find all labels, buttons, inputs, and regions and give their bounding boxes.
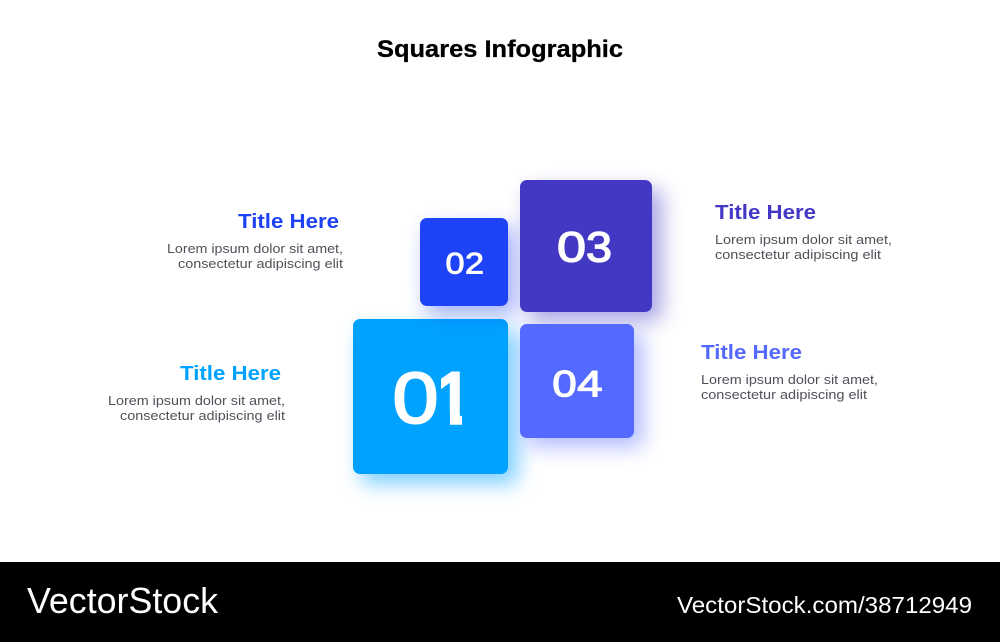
square 04 xyxy=(520,324,643,447)
square 01: 0 xyxy=(392,359,438,439)
footer bar: VectorStock.com/38712949 xyxy=(677,592,972,618)
square 04: 4 xyxy=(577,364,603,404)
square 02: 2 xyxy=(465,248,484,280)
square 01: 1 xyxy=(434,359,474,439)
text block 04: consectetur adipiscing elit xyxy=(701,387,867,402)
square 01 xyxy=(353,319,518,484)
text block 04 xyxy=(701,342,878,402)
text block 03: Title Here xyxy=(715,202,816,224)
text block 02: Lorem ipsum dolor sit amet, xyxy=(167,241,343,256)
text block 02: Title Here xyxy=(238,211,339,233)
square 03 xyxy=(520,180,662,321)
text block 02 xyxy=(167,211,343,271)
text block 03: consectetur adipiscing elit xyxy=(715,247,881,262)
text block 01 xyxy=(108,363,285,423)
text block 01: consectetur adipiscing elit xyxy=(120,408,285,423)
square 02 xyxy=(420,218,516,315)
square 03: 3 xyxy=(586,224,612,272)
text block 02: consectetur adipiscing elit xyxy=(178,256,343,271)
title: Squares Infographic xyxy=(377,36,623,63)
text block 03: Lorem ipsum dolor sit amet, xyxy=(715,232,892,247)
text block 03 xyxy=(715,202,892,262)
footer bar: VectorStock xyxy=(27,580,219,621)
text block 04: Title Here xyxy=(701,342,802,364)
text block 04: Lorem ipsum dolor sit amet, xyxy=(701,372,878,387)
text block 01: Lorem ipsum dolor sit amet, xyxy=(108,393,285,408)
footer bar xyxy=(0,562,1000,642)
square 03: 0 xyxy=(557,224,586,272)
square 02: 0 xyxy=(446,248,464,280)
text block 01: Title Here xyxy=(180,363,281,385)
square 04: 0 xyxy=(552,364,577,404)
